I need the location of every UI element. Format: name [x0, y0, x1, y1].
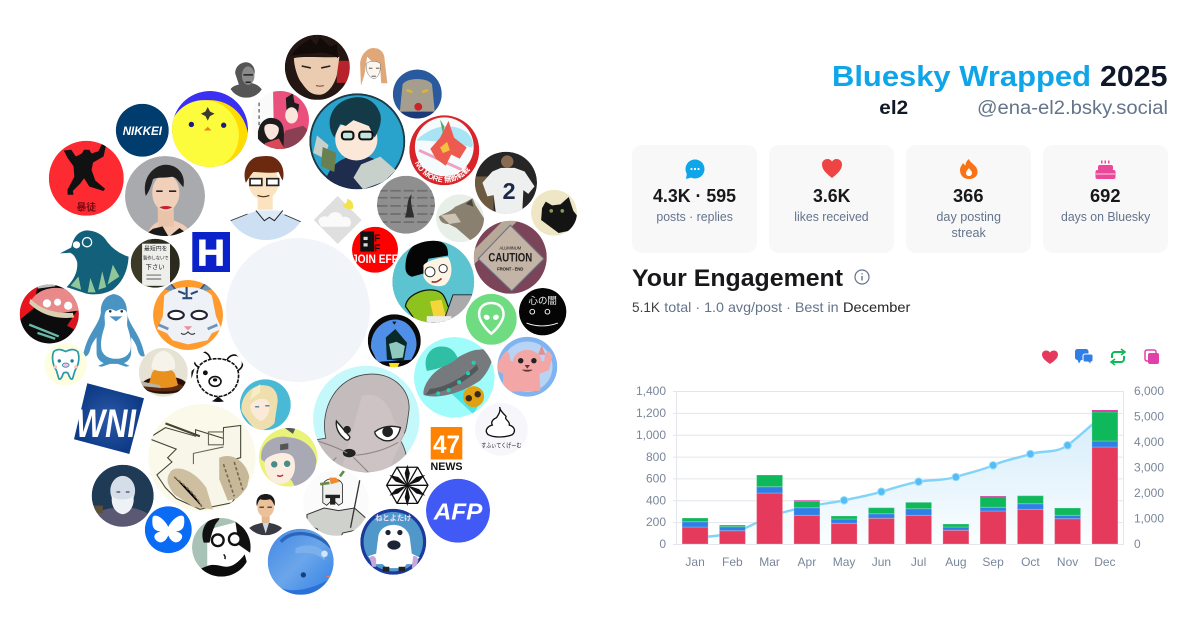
- avatar: poop drawing: [482, 406, 522, 448]
- avatar: red thug silhouette: 暴徒: [77, 201, 96, 214]
- month labels: Sep: [982, 555, 1004, 569]
- avatar: cartoon person at laptop: [392, 240, 474, 323]
- avatar: caution sign: ALUMINUM: [499, 245, 522, 250]
- avatar: sketched teddy bear: [191, 352, 244, 402]
- right axis labels: 5,000: [1134, 410, 1164, 424]
- avatar: grey seal: [313, 366, 420, 472]
- avatar: blue whale: [268, 529, 335, 595]
- avatar: caution sign: FRONT - END: [497, 266, 523, 271]
- title: 2025: [1100, 61, 1168, 93]
- icon: chat bubble: [686, 160, 704, 179]
- stat value: 4.3K · 595: [653, 185, 736, 206]
- engagement summary: 5.1K: [632, 299, 661, 315]
- avatar: black circle with face: [519, 288, 566, 335]
- avatar: Nikkei logo: [116, 104, 169, 157]
- avatar: custard pudding: [139, 348, 188, 397]
- avatar: man in suit: [249, 494, 282, 536]
- stat label: day posting: [936, 209, 1001, 224]
- avatar: poop drawing: すふぃてくげーむ: [481, 440, 521, 449]
- title: Bluesky Wrapped: [832, 61, 1091, 93]
- stat label: streak: [952, 225, 986, 240]
- right axis labels: 0: [1134, 537, 1141, 551]
- avatar: Join EFF: [352, 227, 398, 273]
- month labels: Jan: [685, 555, 705, 569]
- logo: WNI: [74, 383, 144, 454]
- month labels: Nov: [1057, 555, 1078, 569]
- logo: 47 News: [430, 427, 462, 473]
- avatar: caution sign: CAUTION: [488, 252, 532, 265]
- avatar: blue bird with dark mouth: [368, 314, 421, 367]
- chart: monthly engagement: [636, 384, 1164, 569]
- avatar: blonde woman sketch: [351, 48, 395, 92]
- stacked bars: [682, 410, 1118, 544]
- avatar: No More badge: NO MORE 無断転載: [414, 161, 470, 184]
- avatar: H logo: H: [197, 232, 225, 274]
- month labels: Feb: [722, 555, 743, 569]
- avatar: Join EFF: F: [374, 244, 380, 255]
- display name: el2: [879, 98, 908, 119]
- avatar: Loch Ness photo: [377, 176, 435, 234]
- left axis labels: 1,200: [636, 406, 666, 420]
- engagement summary: total · 1.0 avg/post · Best in: [664, 299, 839, 315]
- avatar: asanoha pattern: [386, 464, 429, 507]
- icon: reposts legend: [1111, 349, 1125, 365]
- avatar: Heian court couple: [258, 91, 309, 149]
- avatar: blonde anime face: [240, 379, 291, 431]
- avatar: Japanese notice sign: 最短円を: [144, 245, 168, 253]
- icon: likes heart legend: [1042, 350, 1058, 364]
- avatar: black circle with face: 心の闇: [528, 295, 557, 307]
- heading: Your Engagement: Your Engagement: [632, 265, 843, 292]
- avatar: white ghost with mushrooms: [360, 509, 426, 575]
- month labels: Jun: [872, 555, 891, 569]
- right axis labels: 3,000: [1134, 460, 1164, 474]
- month labels: [685, 555, 1116, 569]
- avatar: Japanese notice sign: 製作しないで: [143, 254, 169, 261]
- logo: AFP: [426, 479, 490, 543]
- right axis labels: 2,000: [1134, 486, 1164, 500]
- avatar: baseball shirt number 2: [475, 152, 537, 215]
- right axis labels: 6,000: [1134, 384, 1164, 398]
- month labels: Aug: [945, 555, 967, 569]
- stat value: 692: [1090, 185, 1120, 206]
- left axis labels: 0: [659, 537, 666, 551]
- avatar: grey haired anime girl: [259, 428, 318, 486]
- engagement summary: December: [843, 299, 911, 315]
- avatar: green alien: [466, 294, 517, 345]
- month labels: Apr: [798, 555, 816, 569]
- avatar: baseball shirt number 2: 2: [503, 178, 516, 204]
- logo: AFP: AFP: [433, 499, 483, 525]
- avatar: blue penguin: [83, 294, 145, 367]
- avatar: black and white cartoon with glasses: [192, 516, 251, 577]
- avatar: weather cloud and moon: [314, 196, 362, 244]
- avatar: caution sign: [474, 221, 547, 294]
- avatar: white ghost with mushrooms: ねとよたけ: [375, 514, 411, 523]
- stat value: 366: [953, 185, 984, 206]
- left axis labels: 200: [646, 515, 666, 529]
- avatar: No More badge: [409, 115, 480, 186]
- avatar: sketched tank: [148, 404, 256, 511]
- month labels: Jul: [911, 555, 926, 569]
- panel: avatar bubble cluster: [20, 34, 577, 595]
- avatar: red thug silhouette: [49, 141, 124, 216]
- panel: stat days: [1043, 145, 1168, 253]
- month labels: Oct: [1021, 555, 1040, 569]
- avatar: Join EFF: F: [374, 233, 380, 244]
- left axis labels: 800: [646, 450, 666, 464]
- chart legend: [1042, 349, 1159, 365]
- avatar: UFO: [414, 337, 495, 418]
- logo: WNI: WNI: [76, 402, 137, 446]
- panel: stat posts: [632, 145, 757, 253]
- panel: stat streak: [906, 145, 1031, 253]
- logo: 47 News: NEWS: [430, 461, 462, 473]
- left axis labels: 1,400: [636, 384, 666, 398]
- avatar: woman portrait: [125, 156, 205, 236]
- avatar: white tiger: [153, 280, 223, 350]
- avatar: Join EFF: JOIN EFF: [352, 254, 398, 266]
- icon: info: [855, 270, 869, 284]
- month labels: Dec: [1094, 555, 1116, 569]
- avatar: grey statue figure: [230, 62, 262, 98]
- avatar: masked manga character: [20, 284, 79, 344]
- month labels: Mar: [759, 555, 780, 569]
- avatar: pink cat: [494, 337, 557, 397]
- avatar: Mandalorian sketch: [306, 470, 366, 536]
- logo: 47 News: 47: [433, 431, 460, 459]
- avatar: anime boy with glasses: [309, 93, 405, 189]
- right axis labels: 1,000: [1134, 512, 1164, 526]
- avatar: blue textile mask: [393, 70, 442, 118]
- stat label: days on Bluesky: [1061, 209, 1151, 224]
- left axis labels: 400: [646, 494, 666, 508]
- avatar: wolf: [436, 194, 484, 242]
- avatar: bearded man in robe: [92, 465, 154, 527]
- right axis labels: 4,000: [1134, 435, 1164, 449]
- icon: cake: [1096, 160, 1116, 179]
- left axis labels: [636, 384, 666, 551]
- avatar: Japanese notice sign: 下さい: [146, 263, 165, 271]
- left axis labels: 600: [646, 472, 666, 486]
- panel: stat likes: [769, 145, 894, 253]
- avatar: teal dove logo: [60, 230, 129, 294]
- avatar: tooth mascot: [44, 343, 87, 386]
- stat value: 3.6K: [813, 185, 851, 206]
- avatar: black cat: [531, 190, 577, 236]
- engagement summary: [632, 299, 911, 315]
- avatar: man with glasses drawing: [230, 156, 301, 240]
- icon: quotes legend: [1145, 350, 1159, 364]
- handle: @ena-el2.bsky.social: [977, 98, 1168, 119]
- avatar: Nikkei logo: NIKKEI: [123, 124, 162, 138]
- cumulative area and line: [695, 410, 1109, 544]
- stat label: posts · replies: [656, 209, 733, 224]
- month labels: May: [833, 555, 855, 569]
- icon: replies chat legend: [1075, 349, 1093, 364]
- central empty circle: [226, 238, 370, 382]
- icon: heart: [822, 159, 842, 178]
- avatar: Bluesky butterfly: [145, 506, 192, 553]
- left axis labels: 1,000: [636, 428, 666, 442]
- avatar: dark-haired man illustration: [285, 35, 350, 100]
- avatar: Japanese notice sign: [131, 239, 180, 288]
- stat label: [936, 209, 1001, 240]
- stat label: likes received: [794, 209, 869, 224]
- avatar: yellow chick: [172, 91, 248, 167]
- right axis labels: [1134, 384, 1164, 551]
- icon: flame: [960, 159, 978, 179]
